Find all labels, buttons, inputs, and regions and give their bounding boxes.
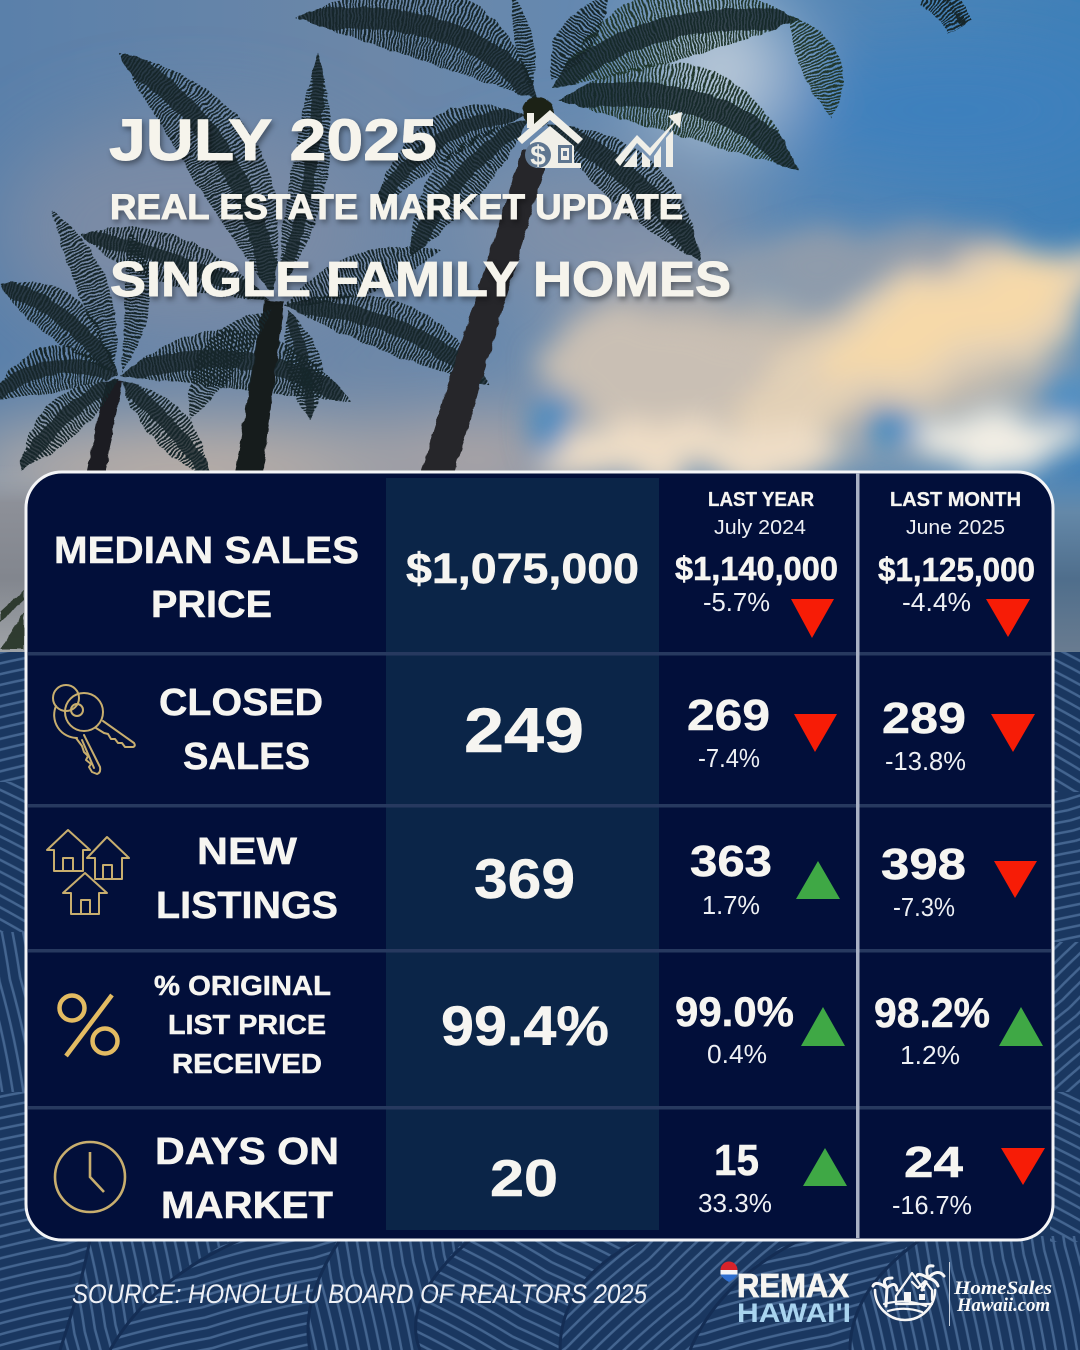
- icon: percent sign: [60, 995, 118, 1056]
- row: median sales price: $1,125,000: [878, 551, 1035, 588]
- row: median sales price: $1,140,000: [675, 550, 838, 587]
- palm tree: small top right: [925, 0, 966, 28]
- row: median sales price: June 2025: [906, 517, 1005, 539]
- row: days on market: DAYS ON: [155, 1131, 339, 1173]
- row: days on market: [55, 1131, 1045, 1227]
- row: median sales price: July 2024: [714, 517, 806, 539]
- icon: keys: [53, 685, 135, 774]
- row: median sales price: PRICE: [151, 584, 272, 626]
- row: percent of original list price received: 98.2%: [874, 989, 990, 1036]
- row: closed sales: [53, 682, 1035, 778]
- row: median sales price: -4.4%: [902, 587, 971, 617]
- icon: rising chart arrow: [615, 112, 682, 167]
- logo: REMAX Hawaii: HAWAI'I: [737, 1298, 851, 1328]
- panel: market data table: [26, 472, 1053, 1240]
- row: median sales price: -5.7%: [703, 587, 770, 617]
- background: sky photo: [0, 0, 1080, 660]
- row: median sales price: LAST MONTH: [890, 489, 1021, 511]
- background: navy leaf pattern: [0, 652, 1080, 1350]
- palm tree: main trunk and crown: [296, 0, 832, 480]
- row: new listings: 1.7%: [702, 890, 760, 920]
- row: percent of original list price received: 99.0%: [675, 988, 794, 1035]
- row: new listings: -7.3%: [893, 892, 955, 922]
- palm tree: middle: [80, 52, 490, 480]
- logo: REMAX Hawaii: [720, 1262, 851, 1328]
- row: days on market: 20: [490, 1150, 558, 1208]
- icon: three houses: [47, 830, 129, 914]
- row: days on market: 24: [904, 1138, 964, 1187]
- row: percent of original list price received: % ORIGINAL: [154, 970, 331, 1001]
- row: new listings: [47, 830, 1037, 927]
- row: percent of original list price received: 99.4%: [441, 994, 609, 1057]
- palm tree: left small: [0, 210, 352, 650]
- subtitle: real estate market update: REAL ESTATE MARKET UPDATE: [110, 188, 683, 227]
- icon: balloon: [720, 1262, 738, 1282]
- row: new listings: 363: [690, 837, 772, 886]
- row: median sales price: [54, 489, 1035, 638]
- row: closed sales: -7.4%: [698, 743, 760, 773]
- row: percent of original list price received: [60, 970, 1043, 1079]
- row: closed sales: SALES: [183, 736, 310, 778]
- title: July 2025: JULY 2025: [109, 108, 437, 173]
- logo: Home Sales Hawaii: [873, 1262, 1052, 1326]
- row: closed sales: -13.8%: [885, 746, 966, 776]
- row: closed sales: CLOSED: [159, 682, 323, 724]
- row: closed sales: 249: [464, 696, 584, 766]
- row: new listings: 369: [474, 847, 575, 910]
- row: median sales price: MEDIAN SALES: [54, 530, 359, 572]
- logo: REMAX Hawaii: REMAX: [737, 1267, 849, 1304]
- row: days on market: MARKET: [161, 1185, 333, 1227]
- icon: house with dollar sign: [517, 110, 583, 171]
- row: median sales price: LAST YEAR: [708, 489, 815, 511]
- row: days on market: 15: [714, 1136, 759, 1185]
- source note: SOURCE: HONOLULU BOARD OF REALTORS 2025: [72, 1279, 648, 1309]
- row: days on market: -16.7%: [892, 1190, 972, 1220]
- row: percent of original list price received: 1.2%: [900, 1040, 960, 1070]
- icon: house and palms badge: [873, 1266, 944, 1320]
- row: median sales price: $1,075,000: [406, 545, 639, 593]
- row: percent of original list price received: 0.4%: [707, 1039, 767, 1069]
- row: days on market: 33.3%: [698, 1188, 772, 1218]
- row: closed sales: 269: [687, 691, 770, 740]
- photo: palm trees: [0, 0, 966, 650]
- row: new listings: 398: [881, 840, 966, 889]
- row: new listings: LISTINGS: [156, 885, 338, 927]
- row: closed sales: 289: [882, 694, 966, 743]
- heading: single family homes: SINGLE FAMILY HOMES: [110, 253, 731, 307]
- icon: clock: [55, 1142, 125, 1212]
- logo: Home Sales Hawaii: Hawaii.com: [956, 1295, 1050, 1316]
- icon: house with dollar sign: $: [530, 140, 546, 171]
- row: new listings: NEW: [197, 831, 297, 873]
- row: percent of original list price received: LIST PRICE: [168, 1009, 326, 1040]
- row: percent of original list price received: RECEIVED: [172, 1048, 322, 1079]
- logo: Home Sales Hawaii: HomeSales: [953, 1278, 1052, 1299]
